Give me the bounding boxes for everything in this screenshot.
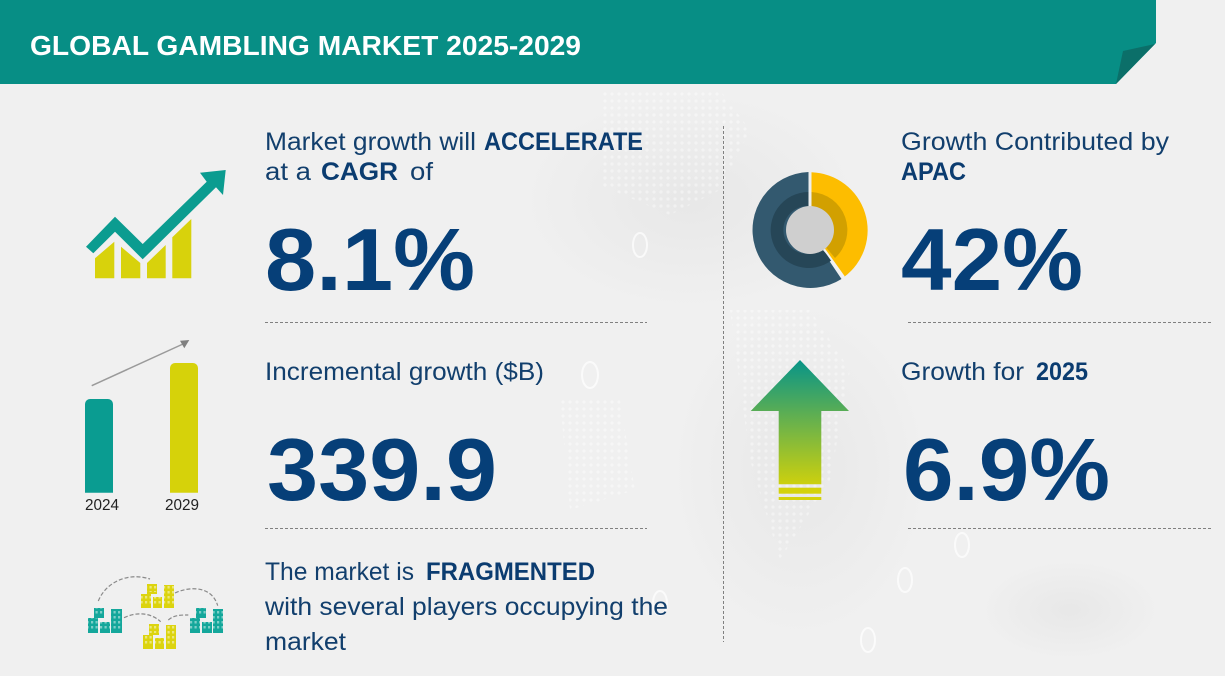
stat: 42%: 42% xyxy=(901,210,1083,309)
text: market growth CAGR: Market growth will xyxy=(265,128,476,156)
header banner xyxy=(0,0,1156,84)
stat: 339.9: 339.9 xyxy=(267,420,497,519)
text: market growth CAGR: CAGR xyxy=(321,158,398,186)
chart: incremental growth bars xyxy=(85,340,199,514)
text: market growth CAGR: at a xyxy=(265,158,311,186)
text: growth for 2025 xyxy=(901,358,1088,386)
text: fragmented market: market xyxy=(265,628,346,656)
text: fragmented market: FRAGMENTED xyxy=(426,558,595,586)
text: growth for 2025: Growth for xyxy=(901,358,1024,386)
text: market growth CAGR xyxy=(265,128,643,186)
icon: fragmented market buildings xyxy=(88,577,223,649)
panel dividers xyxy=(265,126,1213,642)
icon: APAC donut chart xyxy=(753,172,868,288)
title: GLOBAL GAMBLING MARKET 2025-2029 xyxy=(30,30,581,61)
text: market growth CAGR: of xyxy=(410,158,433,186)
text: fragmented market: with several players occupying the xyxy=(264,593,668,621)
text: growth contributed by APAC: Growth Contributed by xyxy=(901,128,1170,156)
icon: growth chart with arrow xyxy=(86,170,226,278)
chart: incremental growth bars: 2029 xyxy=(165,497,199,514)
text: fragmented market: The market is xyxy=(265,558,414,586)
text: growth for 2025: 2025 xyxy=(1036,358,1088,386)
text: fragmented market xyxy=(264,558,668,656)
stat: 8.1%: 8.1% xyxy=(265,210,475,309)
icon: up arrow xyxy=(751,360,849,500)
text: growth contributed by APAC xyxy=(901,128,1170,186)
stat: 6.9%: 6.9% xyxy=(903,420,1110,519)
chart: incremental growth bars: 2024 xyxy=(85,497,119,514)
text: growth contributed by APAC: APAC xyxy=(901,158,966,186)
text: incremental growth: Incremental growth ($B) xyxy=(265,358,544,386)
text: market growth CAGR: ACCELERATE xyxy=(484,128,643,156)
